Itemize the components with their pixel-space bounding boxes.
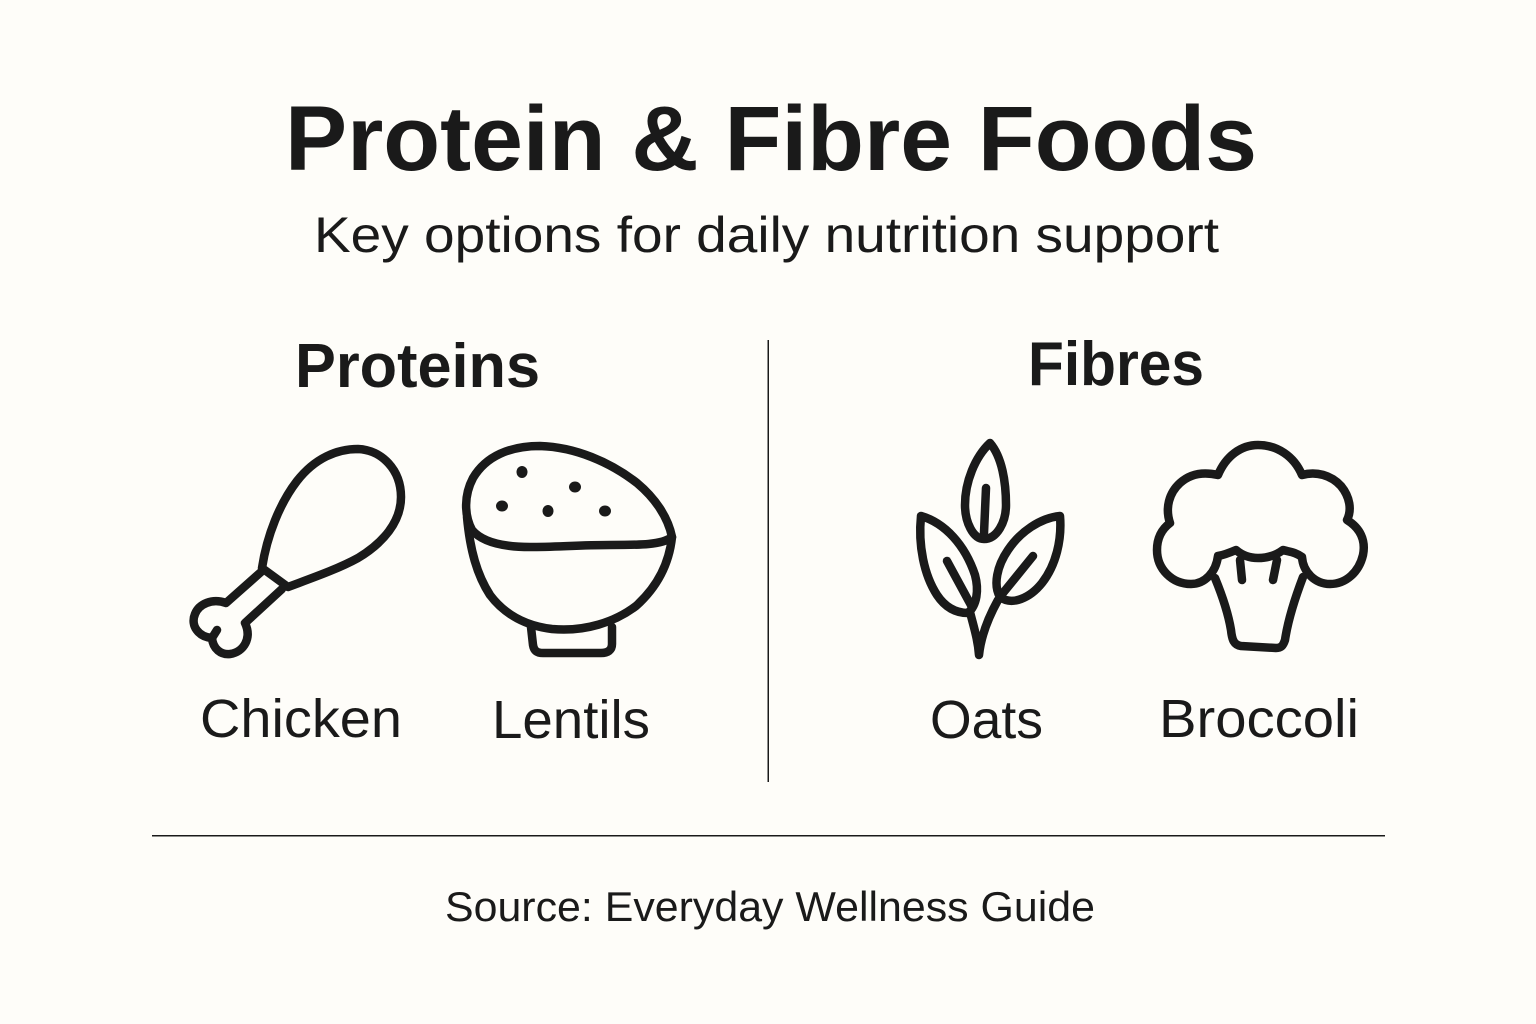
icon: chicken drumstick [194, 449, 401, 654]
label: oats: Oats [930, 690, 1043, 750]
vertical divider [768, 340, 769, 782]
icon: broccoli [1157, 445, 1364, 648]
horizontal divider [152, 835, 1385, 836]
icon: oats plant [920, 443, 1060, 655]
heading: proteins: Proteins [295, 332, 540, 401]
label: broccoli: Broccoli [1159, 689, 1359, 749]
heading: fibres: Fibres [1028, 330, 1204, 399]
label: lentils: Lentils [492, 690, 650, 750]
source note: Source: Everyday Wellness Guide [445, 883, 1095, 930]
label: chicken: Chicken [200, 689, 402, 749]
title: Protein & Fibre Foods [285, 88, 1257, 190]
subtitle: Key options for daily nutrition support [314, 207, 1219, 263]
lentil dots [496, 466, 611, 517]
icon: lentil bowl [466, 446, 672, 653]
